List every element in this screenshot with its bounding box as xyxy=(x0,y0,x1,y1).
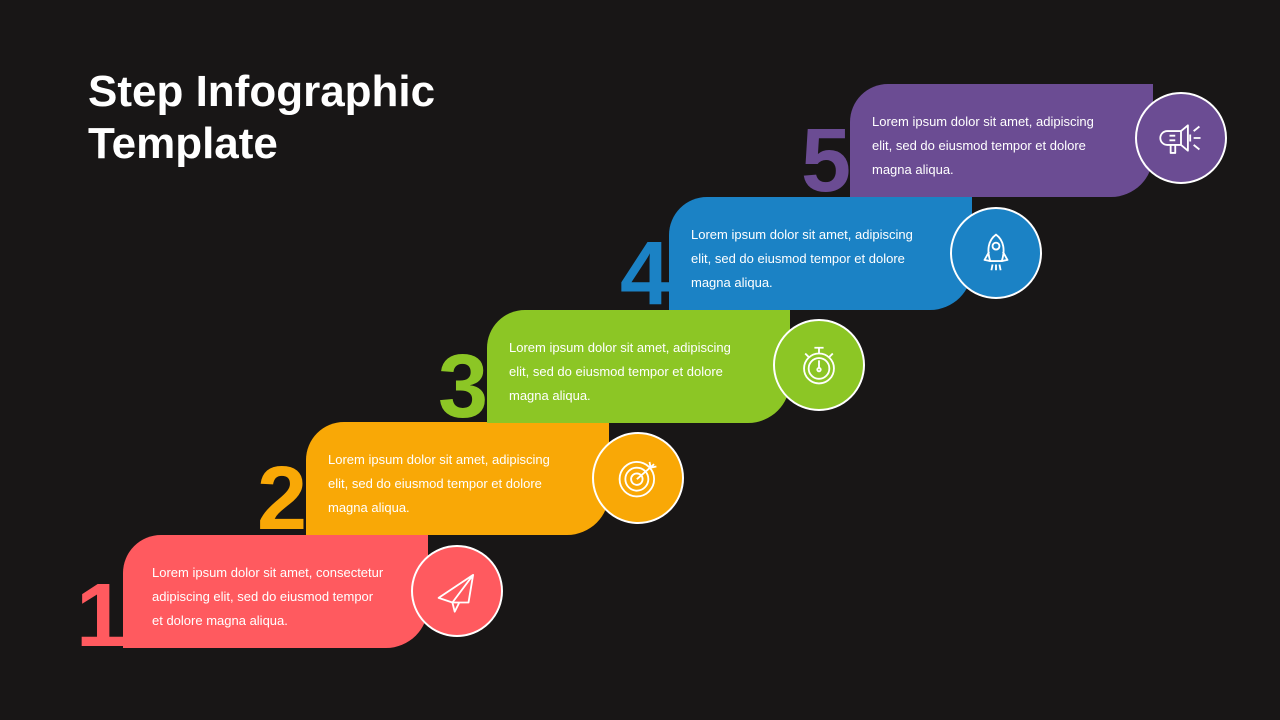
step 3 xyxy=(438,310,865,437)
step 5 xyxy=(801,84,1227,211)
title: Template xyxy=(88,119,278,168)
box 3 xyxy=(487,310,790,423)
box 5 xyxy=(850,84,1153,197)
box 2 xyxy=(306,422,609,535)
text 5: Lorem ipsum dolor sit amet, adipiscing elit, sed do eiusmod tempor et dolore magna aliqua. xyxy=(872,114,1094,177)
number 2: 2 xyxy=(257,449,307,549)
text 1: Lorem ipsum dolor sit amet, consectetur adipiscing elit, sed do eiusmod tempor et dolore magna aliqua. xyxy=(152,565,383,628)
text 3: Lorem ipsum dolor sit amet, adipiscing elit, sed do eiusmod tempor et dolore magna aliqua. xyxy=(509,340,731,403)
step 4 xyxy=(620,197,1042,324)
step 2 xyxy=(257,422,684,549)
title: Step Infographic xyxy=(88,67,435,116)
number 4: 4 xyxy=(620,224,670,324)
text 2: Lorem ipsum dolor sit amet, adipiscing elit, sed do eiusmod tempor et dolore magna aliqua. xyxy=(328,452,550,515)
number 3: 3 xyxy=(438,337,488,437)
icon: stopwatch xyxy=(773,319,865,411)
icon: target xyxy=(592,432,684,524)
icon: paper plane xyxy=(411,545,503,637)
icon: megaphone xyxy=(1135,92,1227,184)
number 5: 5 xyxy=(801,111,851,211)
text 4: Lorem ipsum dolor sit amet, adipiscing elit, sed do eiusmod tempor et dolore magna aliqua. xyxy=(691,227,913,290)
box 4 xyxy=(669,197,972,310)
title xyxy=(88,67,435,168)
step 1 xyxy=(76,535,503,666)
icon: rocket xyxy=(950,207,1042,299)
box 1 xyxy=(123,535,428,648)
number 1: 1 xyxy=(76,566,126,666)
